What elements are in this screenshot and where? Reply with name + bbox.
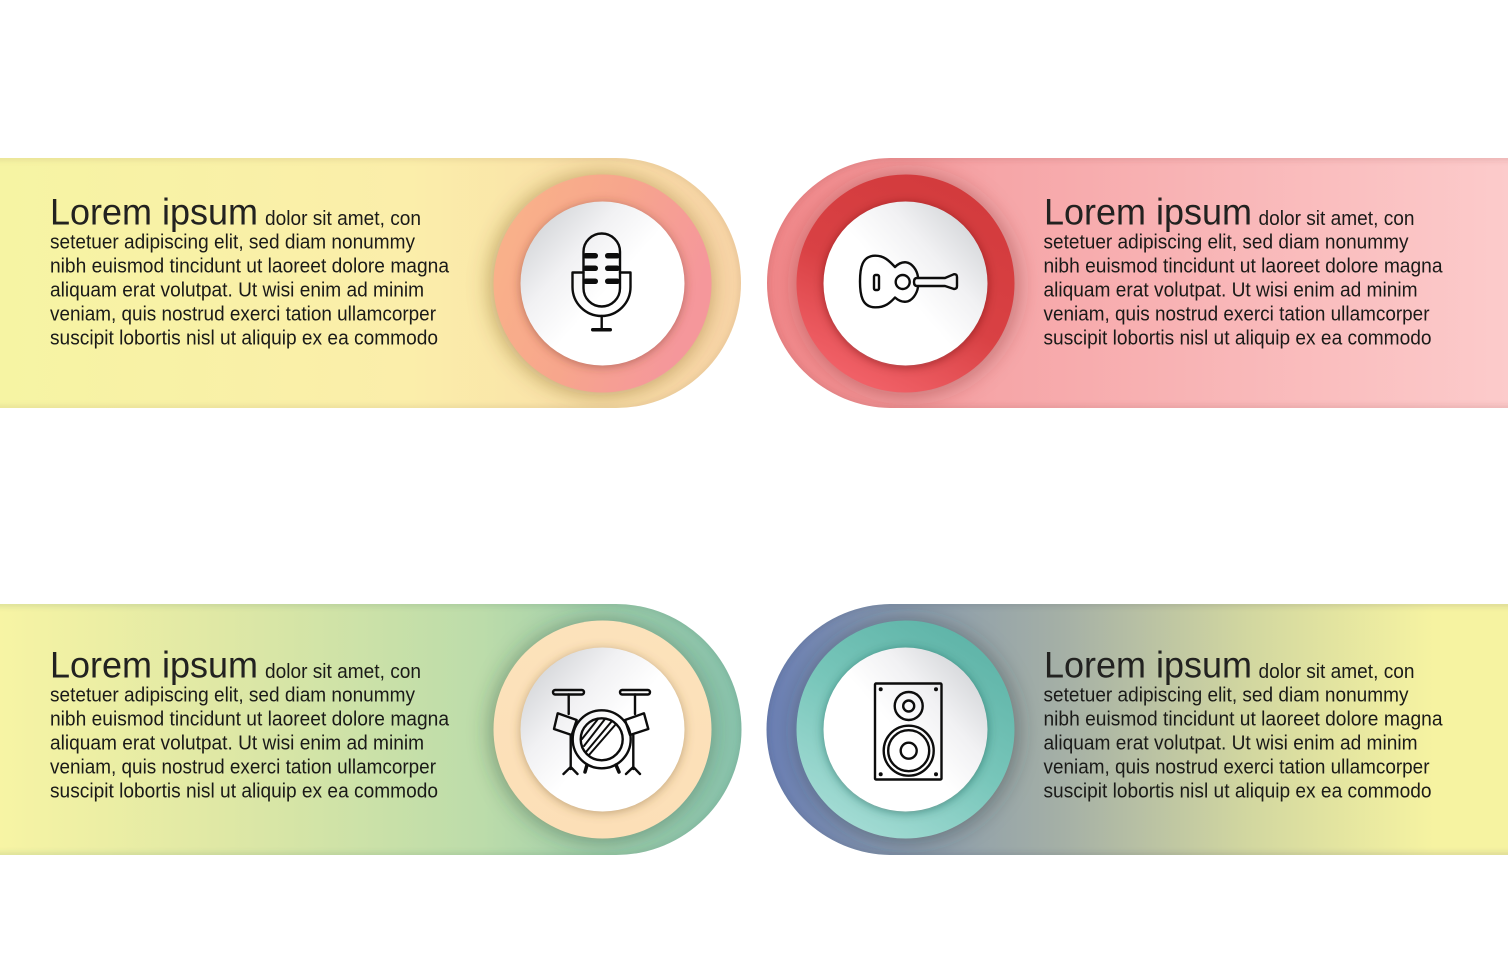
text block: suscipit lobortis nisl ut aliquip ex ea commodo	[1044, 328, 1432, 350]
panel: microphone	[0, 158, 741, 408]
text block: suscipit lobortis nisl ut aliquip ex ea commodo	[1044, 780, 1432, 802]
icon: guitar	[860, 256, 957, 307]
ring: cream	[494, 620, 712, 838]
text block: setetuer adipiscing elit, sed diam nonummy	[50, 232, 415, 254]
text block: nibh euismod tincidunt ut laoreet dolore magna	[50, 708, 450, 730]
text block: dolor sit amet, con	[1258, 661, 1414, 683]
ring: deep red	[796, 174, 1014, 392]
text block: veniam, quis nostrud exerci tation ullamcorper	[1044, 756, 1430, 778]
ring: orange to pink	[494, 174, 712, 392]
ring: teal	[796, 620, 1014, 838]
text block: aliquam erat volutpat. Ut wisi enim ad minim	[50, 280, 424, 302]
text block: aliquam erat volutpat. Ut wisi enim ad minim	[1044, 732, 1418, 754]
icon: drum kit	[553, 690, 650, 774]
text block: Lorem ipsum	[1044, 192, 1252, 232]
banner: coral to pale pink	[767, 158, 1508, 408]
panel: guitar	[767, 158, 1508, 408]
banner: blue to yellow	[766, 604, 1508, 855]
text block: Lorem ipsum	[1044, 644, 1252, 686]
panel: speaker	[766, 604, 1508, 855]
text block	[50, 192, 450, 350]
disc: white centre	[824, 202, 988, 366]
text block: Lorem ipsum	[50, 644, 258, 686]
icon: speaker	[875, 684, 942, 780]
text block: veniam, quis nostrud exerci tation ullamcorper	[50, 304, 436, 326]
text block	[1044, 644, 1443, 802]
text block: setetuer adipiscing elit, sed diam nonummy	[1044, 684, 1408, 706]
text block: aliquam erat volutpat. Ut wisi enim ad minim	[1044, 280, 1418, 302]
banner: yellow to green	[0, 604, 742, 855]
disc: white centre	[520, 648, 684, 812]
text block: setetuer adipiscing elit, sed diam nonummy	[50, 684, 415, 706]
disc: white centre	[824, 648, 988, 812]
icon: microphone	[572, 234, 630, 332]
text block	[50, 644, 450, 802]
banner: yellow to peach	[0, 158, 741, 408]
text block: nibh euismod tincidunt ut laoreet dolore magna	[1044, 256, 1443, 278]
text block: veniam, quis nostrud exerci tation ullamcorper	[50, 756, 436, 778]
text block: Lorem ipsum	[50, 192, 258, 232]
text block	[1044, 192, 1443, 350]
text block: dolor sit amet, con	[265, 661, 421, 683]
text block: nibh euismod tincidunt ut laoreet dolore magna	[1044, 708, 1443, 730]
text block: nibh euismod tincidunt ut laoreet dolore magna	[50, 256, 450, 278]
text block: veniam, quis nostrud exerci tation ullamcorper	[1044, 304, 1430, 326]
disc: white centre	[520, 202, 684, 366]
text block: setetuer adipiscing elit, sed diam nonummy	[1044, 232, 1408, 254]
text block: dolor sit amet, con	[265, 208, 421, 230]
panel: drums	[0, 604, 742, 855]
text block: suscipit lobortis nisl ut aliquip ex ea commodo	[50, 328, 438, 350]
text block: suscipit lobortis nisl ut aliquip ex ea commodo	[50, 780, 438, 802]
text block: dolor sit amet, con	[1258, 208, 1414, 230]
text block: aliquam erat volutpat. Ut wisi enim ad minim	[50, 732, 424, 754]
